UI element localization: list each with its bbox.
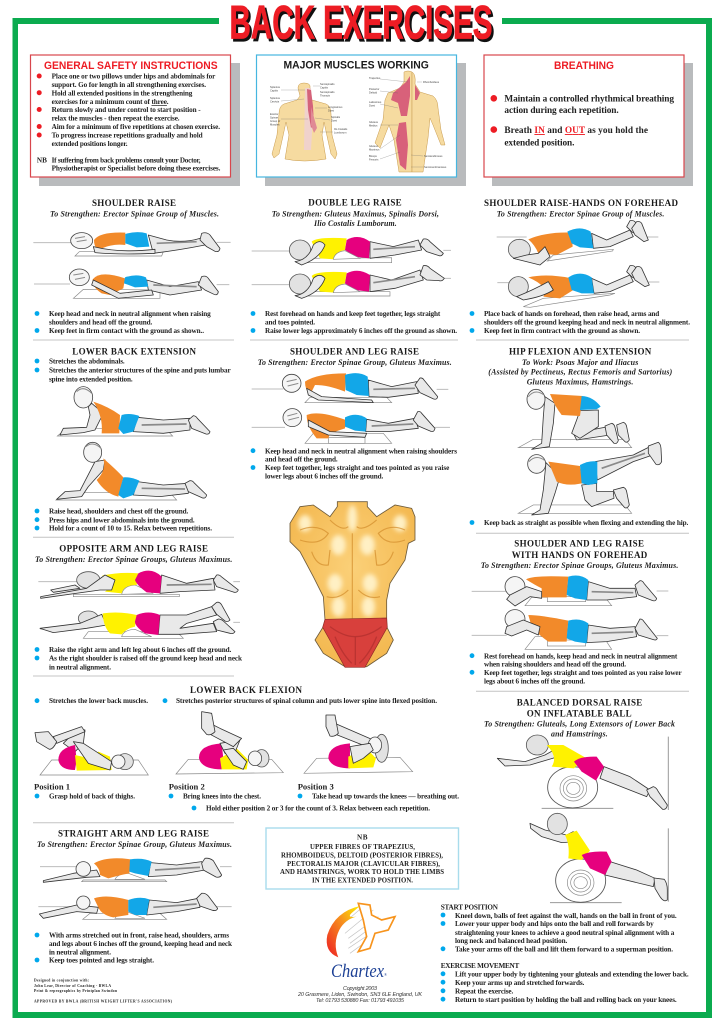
figure: flexion position 2 (176, 712, 283, 774)
panel: opposite arm and leg raise (35, 544, 242, 671)
text: opposite arm and leg raise instructions: Raise the right arm and left leg about 6 inches off the ground. (49, 646, 232, 654)
panel: general safety instructions: exercises for a minimum count of three. (52, 98, 169, 106)
anatomy chart: Semimembranosus (424, 165, 447, 169)
anatomy chart: Latissimus (369, 100, 382, 104)
figure: double leg raise, position 2 (252, 266, 451, 298)
text: opposite arm and leg raise instructions (35, 646, 242, 671)
anatomy chart: Lumborum (334, 130, 346, 134)
text: shoulder raise instructions (35, 310, 211, 335)
text: lower back extension notes: Stretches the anterior structures of the spine and puts lumbar (49, 367, 231, 375)
anatomy chart: Muscles (270, 122, 280, 126)
anatomy chart: Ilio Costalis (334, 127, 348, 131)
figure: flexion position 3 (304, 715, 413, 773)
panel: opposite arm and leg raise: To Strengthen: Erector Spinae Groups, Gluteus Maximus. (35, 555, 232, 564)
logo: Chartex (327, 903, 395, 982)
credits: Print & reprographics by Printplan Swindon (34, 989, 117, 993)
panel: lower back extension: LOWER BACK EXTENSION (72, 346, 196, 356)
text: flexion positions: Take head up towards the knees — breathing out. (312, 792, 459, 800)
figure: hands on forehead leg raise, position 2 (472, 610, 668, 649)
panel: major muscles working (256, 55, 466, 186)
text: flexion notes: Stretches posterior structures of spinal column and puts lower spine into flexed position. (176, 697, 437, 705)
anatomy chart: Splenius (270, 85, 281, 89)
panel: straight arm and leg raise: To Strengthen: Erector Spinae Group, Gluteus Maximus. (37, 840, 232, 849)
panel: general safety instructions: If suffering from back problems consult your Doctor, (52, 156, 201, 164)
figure: opposite arm and leg raise, position 1 (38, 571, 240, 598)
panel: shoulder raise hands on forehead: SHOULDER RAISE-HANDS ON FOREHEAD (484, 198, 678, 208)
panel: hip flexion and extension: HIP FLEXION AND EXTENSION (509, 346, 652, 356)
anatomy chart: Dorsi (331, 118, 337, 122)
figure: ball raise, position 2 (530, 813, 668, 903)
text: flexion positions: Position 2 (169, 782, 205, 792)
anatomy chart: Capitis (320, 86, 329, 90)
panel: double leg raise: To Strengthen: Gluteus Maximus, Spinalis Dorsi, (272, 210, 439, 218)
text: double leg raise instructions (251, 310, 457, 335)
text: shoulder and leg raise instructions (251, 447, 457, 481)
callout: NB note: NB (357, 834, 368, 842)
text: start position (441, 904, 677, 954)
panel: breathing (484, 55, 693, 186)
text: double leg raise instructions: Raise lower legs approximately 6 inches off the ground as shown. (265, 327, 457, 335)
panel: opposite arm and leg raise: OPPOSITE ARM AND LEG RAISE (59, 544, 208, 554)
text: double leg raise instructions: and toes pointed. (265, 319, 315, 327)
panel: general safety instructions: Physiotherapist or Specialist before doing these exercises. (52, 165, 221, 173)
text: copyright and address: 20 Grasmere, Liden, Swindon, SN3 6LE England, UK (297, 992, 422, 998)
anatomy chart: Semitendinosus (424, 154, 443, 158)
panel: general safety instructions: To progress increase repetitions gradually and hold (52, 131, 203, 139)
credits (34, 979, 173, 1003)
figure: hands on forehead, position 1 (497, 220, 658, 265)
text: opposite arm and leg raise instructions: As the right shoulder is raised off the ground keep head and neck (49, 655, 242, 663)
figure: hands on forehead leg raise, position 1 (472, 576, 668, 606)
panel: breathing: BREATHING (554, 60, 614, 72)
text: shoulder raise instructions: Keep feet in firm contact with the ground as shown.. (49, 327, 204, 335)
anatomy chart: Gluteus (369, 120, 379, 124)
text: hands on forehead instructions (470, 310, 690, 335)
text: hands on forehead leg raise instructions: legs about 6 inches off the ground. (484, 677, 585, 685)
anatomy chart: Rhomboideus (423, 80, 440, 84)
figure: double leg raise, position 1 (252, 237, 451, 265)
panel: double leg raise: DOUBLE LEG RAISE (308, 198, 402, 208)
text: exercise movement: Repeat the exercise. (455, 988, 514, 996)
panel: general safety instructions: Place one or two pillows under hips and abdominals for (52, 73, 216, 81)
text: start position: Take your arms off the ball and lift them forward to a superman position. (455, 946, 673, 954)
text: copyright and address (297, 986, 422, 1004)
text: lower back extension notes: Stretches the abdominals. (49, 358, 125, 366)
logo: Chartex: ® (384, 972, 387, 977)
text: lower back extension instructions: Raise head, shoulders and chest off the ground. (49, 508, 189, 516)
anatomy chart: Dorsi (369, 104, 375, 108)
text: shoulder and leg raise instructions: and head off the ground. (265, 456, 338, 464)
panel: balanced dorsal raise on inflatable ball: To Strengthen: Gluteals, Long Extensors of Lower Back (484, 720, 675, 728)
panel: shoulder and leg raise with hands on forehead: WITH HANDS ON FOREHEAD (512, 550, 648, 560)
text: shoulder raise instructions: Keep head and neck in neutral alignment when raising (49, 310, 211, 318)
text: lower back extension instructions: Press hips and lower abdominals into the ground. (49, 516, 195, 524)
anatomy chart: Splenius (270, 96, 281, 100)
panel: lower back extension (35, 346, 231, 533)
credits: John Lear, Director of Coaching - BWLA (34, 984, 111, 988)
text: exercise movement: EXERCISE MOVEMENT (441, 962, 520, 970)
anatomy chart: Cervicis (270, 100, 280, 104)
text: lower back extension notes (35, 358, 231, 383)
callout: NB note: AND HAMSTRINGS, WORK TO HOLD THE LIMBS (280, 869, 444, 876)
text: hands on forehead leg raise instructions: when raising shoulders and head off the ground. (484, 661, 626, 669)
text: hands on forehead instructions: shoulders off the ground keeping head and neck in neutral alignment. (484, 319, 690, 327)
panel: shoulder raise: SHOULDER RAISE (92, 198, 176, 208)
panel: shoulder and leg raise with hands on forehead: To Strengthen: Erector Spinae Groups, Gluteus Maximus. (481, 561, 678, 570)
figure: flexion position 1 (35, 727, 148, 775)
panel: general safety instructions: GENERAL SAFETY INSTRUCTIONS (44, 60, 218, 72)
panel: shoulder and leg raise with hands on forehead: SHOULDER AND LEG RAISE (514, 539, 644, 549)
anatomy chart: Longissimus (328, 105, 343, 109)
text: exercise movement: Keep your arms up and stretched forwards. (455, 979, 585, 987)
figure: hip flexion, knees under hips (518, 389, 632, 449)
anatomy chart (270, 71, 447, 172)
anatomy chart: Maximus (369, 148, 380, 152)
callout: NB note (266, 828, 458, 889)
text: flexion positions (34, 782, 459, 812)
callout: NB note: RHOMBOIDEUS, DELTOID (POSTERIOR FIBRES), (281, 852, 443, 860)
anatomy chart: Spinae (270, 116, 279, 120)
text: lower back extension notes: spine into extended position. (49, 375, 133, 383)
text: straight arm raise instructions: and legs about 6 inches off the ground, keeping head and neck (49, 940, 232, 948)
panel: general safety instructions: Hold all extended positions in the strengthening (52, 89, 193, 97)
text: hands on forehead instructions: Place back of hands on forehead, then raise head, arms and (484, 310, 659, 318)
text: double leg raise instructions: Rest forehead on hands and keep feet together, legs straight (265, 310, 441, 318)
text: shoulder and leg raise instructions: lower legs about 6 inches off the ground. (265, 473, 384, 481)
text: start position: Lower your upper body and hips onto the ball and roll forwards by (455, 920, 654, 928)
text: flexion notes: Stretches the lower back muscles. (49, 697, 148, 705)
panel: double leg raise (251, 198, 457, 335)
panel: general safety instructions: Return slowly and under control to start position - (52, 106, 201, 114)
figure: shoulder and leg raise, position 1 (252, 373, 448, 403)
text: flexion positions: Position 3 (298, 782, 334, 792)
anatomy chart: Gluteus (369, 144, 379, 148)
panel: balanced dorsal raise on inflatable ball: BALANCED DORSAL RAISE (517, 697, 642, 707)
anatomy chart: Posterior (369, 87, 380, 91)
panel: major muscles working: MAJOR MUSCLES WORKING (284, 59, 429, 71)
anatomy chart: Femoris (369, 158, 379, 162)
text: hands on forehead instructions: Keep feet in firm contract with the ground as shown. (484, 327, 640, 335)
text: start position: straightening your knees to achieve a good neutral spinal alignment with a (455, 929, 675, 937)
text: exercise movement: Return to start position by holding the ball and rolling back on your knees. (455, 996, 677, 1004)
panel: breathing: action during each repetition. (504, 106, 619, 116)
panel: breathing: Maintain a controlled rhythmical breathing (504, 95, 674, 105)
panel: shoulder and leg raise (251, 346, 457, 481)
credits: Designed in conjunction with: (34, 979, 89, 983)
panel: hip flexion and extension (470, 346, 689, 527)
text: straight arm raise instructions (35, 932, 232, 964)
panel: double leg raise: Ilio Costalis Lumborum. (313, 219, 397, 228)
panel: shoulder and leg raise with hands on forehead (470, 539, 682, 685)
text: start position: long neck and balanced head position. (455, 937, 568, 945)
text: flexion positions: Grasp hold of back of thighs. (49, 792, 135, 800)
panel: general safety instructions: extended positions longer. (52, 140, 128, 148)
text: flexion notes (35, 697, 437, 705)
text: shoulder raise instructions: shoulders and head off the ground. (49, 319, 153, 327)
text: copyright and address: Tel: 01793 530880 Fax: 01793 491035 (316, 998, 405, 1004)
text: start position: START POSITION (441, 904, 499, 912)
panel: breathing: extended position. (504, 138, 574, 148)
text: copyright and address: Copyright 2003 (343, 986, 377, 992)
callout: NB note: IN THE EXTENDED POSITION. (312, 878, 413, 884)
panel: general safety instructions: support. Go for length in all strengthening exercises. (52, 81, 206, 89)
panel: shoulder and leg raise: To Strengthen: Erector Spinae Group, Gluteus Maximus. (258, 358, 452, 367)
text: exercise movement (441, 962, 689, 1004)
anatomy chart: Spinalis (331, 115, 341, 119)
text: shoulder and leg raise instructions: Keep head and neck in neutral alignment when raising shoulders (265, 447, 457, 455)
text: flexion positions: Position 1 (34, 782, 70, 792)
anatomy chart: Group of (270, 119, 280, 123)
anatomy chart: Thoracis (320, 94, 331, 98)
text: hands on forehead leg raise instructions: Keep feet together, legs straight and toes pointed as you raise lower (484, 669, 682, 677)
panel: straight arm and leg raise: STRAIGHT ARM AND LEG RAISE (58, 828, 209, 838)
anatomy chart: Deltoid (369, 90, 378, 94)
anatomy chart: Dorsi (328, 108, 334, 112)
anatomy chart: Biceps (369, 154, 377, 158)
figure: lower back extension, position 2 (56, 442, 207, 500)
figure: opposite arm and leg raise, position 2 (40, 602, 240, 638)
text: opposite arm and leg raise instructions: in neutral alignment. (49, 663, 111, 671)
panel: shoulder raise: To Strengthen: Erector Spinae Group of Muscles. (50, 209, 219, 218)
panel: breathing: Breath IN and OUT as you hold the (504, 126, 648, 136)
text: straight arm raise instructions: Keep toes pointed and legs straight. (49, 956, 154, 964)
figure: hip extension, leg raised (518, 442, 662, 515)
credits: APPROVED BY BWLA (BRITISH WEIGHT LIFTER'S ASSOCIATION) (34, 999, 173, 1003)
callout: NB note: UPPER FIBRES OF TRAPEZIUS, (310, 844, 415, 851)
figure: straight arm raise, position 1 (40, 858, 232, 882)
text: exercise movement: Lift your upper body by tightening your gluteals and extending the lower back. (455, 970, 689, 978)
text: straight arm raise instructions: in neutral alignment. (49, 948, 111, 956)
figure: shoulder raise, position 2 (34, 269, 229, 298)
panel: general safety instructions: relax the muscles - then repeat the exercise. (52, 115, 180, 123)
anatomy chart: Semispinalis (320, 82, 335, 86)
anatomy chart: Erector (270, 112, 278, 116)
panel: shoulder raise (33, 198, 231, 335)
text: start position: Kneel down, balls of feet against the wall, hands on the ball in front of you. (455, 912, 677, 920)
panel: shoulder and leg raise: SHOULDER AND LEG RAISE (290, 346, 419, 356)
text: hip flexion instructions: Keep back as straight as possible when flexing and extending the hip. (484, 519, 689, 527)
text: hands on forehead leg raise instructions (470, 652, 682, 685)
callout: NB note: PECTORALIS MAJOR (CLAVICULAR FIBRES), (287, 861, 440, 868)
illustration: back muscles torso (290, 502, 415, 667)
figure: shoulder raise, position 1 (33, 232, 231, 256)
panel: general safety instructions: Aim for a minimum of five repetitions at chosen exercise. (52, 123, 220, 131)
panel: hip flexion and extension: Gluteus Maximus, Hamstrings. (527, 378, 633, 386)
anatomy chart: Semispinalis (320, 90, 335, 94)
title (230, 0, 494, 51)
figure: lower back extension, position 1 (57, 387, 210, 436)
panel: balanced dorsal raise on inflatable ball: ON INFLATABLE BALL (527, 709, 632, 719)
text: straight arm raise instructions: With arms stretched out in front, raise head, shoulders, arms (49, 932, 229, 940)
figure: ball raise, position 1 (497, 735, 668, 810)
figure: hands on forehead, position 2 (497, 265, 659, 307)
panel: hip flexion and extension: (Assisted by Pectineus, Rectus Femoris and Sartorius) (488, 368, 673, 376)
figure: straight arm raise, position 2 (38, 893, 232, 919)
panel: lower back flexion: LOWER BACK FLEXION (190, 685, 302, 695)
panel: lower back flexion (34, 685, 459, 812)
text: lower back extension instructions (35, 508, 212, 533)
panel: straight arm and leg raise (35, 828, 232, 964)
panel: balanced dorsal raise on inflatable ball: and Hamstrings. (551, 730, 608, 738)
text: flexion positions: Bring knees into the chest. (183, 792, 261, 800)
anatomy chart: Capitis (270, 88, 279, 92)
text: flexion positions: Hold either position 2 or 3 for the count of 3. Relax between each repetition. (206, 804, 430, 812)
anatomy chart: Medius (369, 124, 378, 128)
panel: shoulder raise hands on forehead (470, 198, 690, 335)
panel: balanced dorsal raise on inflatable ball (441, 697, 689, 1004)
anatomy chart: Trapezius (369, 76, 381, 80)
figure: shoulder and leg raise, position 2 (252, 409, 450, 443)
panel: hip flexion and extension: To Work: Psoas Major and Iliacus (522, 358, 638, 367)
text: hands on forehead leg raise instructions: Rest forehead on hands, keep head and neck in neutral alignment (484, 652, 678, 660)
logo: Chartex: Chartex (331, 961, 384, 982)
panel: general safety instructions: NB (37, 156, 47, 164)
text: lower back extension instructions: Hold for a count of 10 to 15. Relax between repetitions. (49, 525, 212, 533)
panel: shoulder raise hands on forehead: To Strengthen: Erector Spinae Group of Muscles. (497, 210, 664, 218)
text: shoulder and leg raise instructions: Keep feet together, legs straight and toes pointed as you raise (265, 464, 449, 472)
panel: general safety instructions (30, 55, 240, 186)
